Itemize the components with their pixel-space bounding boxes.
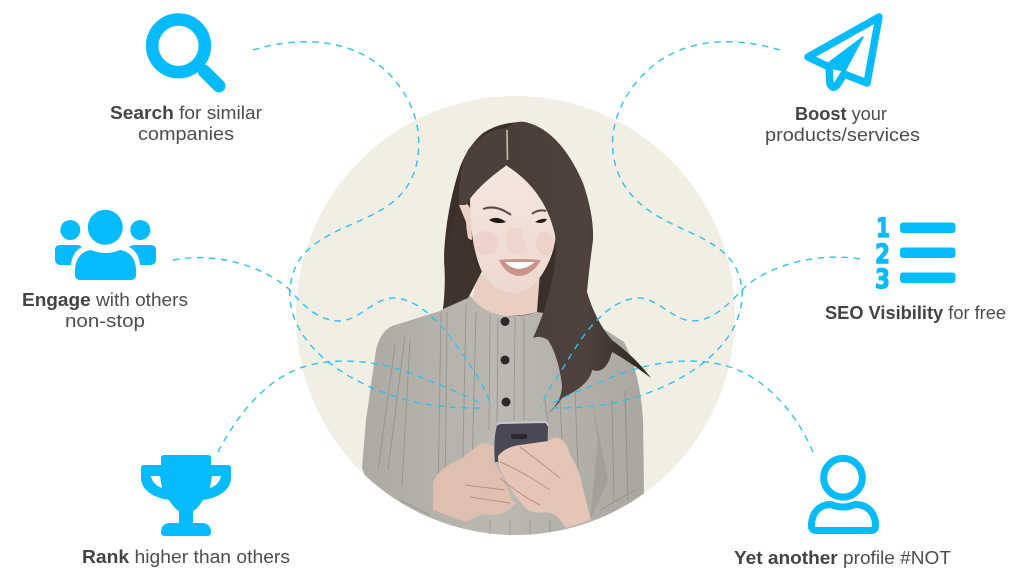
shirt pleats: [378, 305, 635, 545]
beige background circle: [296, 96, 735, 535]
label: boost line 2: products/services: [765, 125, 920, 145]
item: seo: [825, 213, 1006, 323]
icon: numbered list: 1: [876, 213, 890, 244]
label: rank: Rank higher than others: [82, 547, 290, 567]
icon: group of people: [55, 210, 156, 280]
label: profile: Yet another profile #NOT: [734, 548, 951, 568]
finger lines: [465, 447, 560, 505]
dashed connector: seo: [541, 257, 860, 407]
icon: paper plane: [808, 17, 879, 87]
dashed connector: search: [253, 42, 480, 408]
teeth: [505, 262, 535, 269]
front hair, right: [507, 122, 651, 414]
dashed connector: boost: [553, 42, 780, 408]
right hand: [498, 438, 591, 528]
cheek blush: [473, 231, 499, 255]
icon: magnifying glass: [152, 20, 219, 86]
icon: numbered list: 3: [875, 264, 890, 295]
hair parting: [506, 130, 508, 160]
label: boost: Boost your: [795, 104, 887, 124]
icon: user outline: [812, 458, 876, 530]
item: boost: [765, 17, 920, 145]
neck: [472, 272, 540, 316]
face: [470, 165, 556, 293]
back hair: [443, 122, 556, 316]
eyes: [489, 218, 547, 223]
item: engage: [22, 210, 188, 331]
label: seo: SEO Visibility for free: [825, 303, 1006, 323]
label: engage: Engage with others: [22, 290, 188, 310]
nose shadow: [507, 228, 528, 254]
item: rank: [82, 455, 290, 567]
ear: [459, 202, 472, 240]
photo: woman holding a phone: [362, 122, 651, 545]
item: search: [110, 20, 262, 144]
hair, left strands: [443, 205, 480, 309]
label: search: Search for similar: [110, 103, 262, 123]
phone: [494, 422, 548, 462]
icon: numbered list: [875, 213, 956, 295]
shirt buttons: [500, 317, 510, 406]
mouth: [499, 259, 541, 276]
sleeve shadow: [590, 407, 608, 518]
item: profile: [734, 458, 951, 568]
label: engage line 2: non-stop: [65, 311, 145, 331]
dashed connector: profile: [553, 361, 813, 452]
front hair, left: [459, 128, 507, 205]
dashed connector: rank: [218, 361, 480, 452]
icon: numbered list: 2: [875, 239, 890, 270]
label: search line 2: companies: [138, 124, 234, 144]
phone camera: [511, 434, 527, 439]
eyebrows: [483, 207, 546, 215]
dashed connector: engage: [173, 258, 491, 407]
shirt: [362, 293, 644, 545]
left hand: [433, 443, 516, 522]
icon: trophy: [141, 455, 231, 536]
